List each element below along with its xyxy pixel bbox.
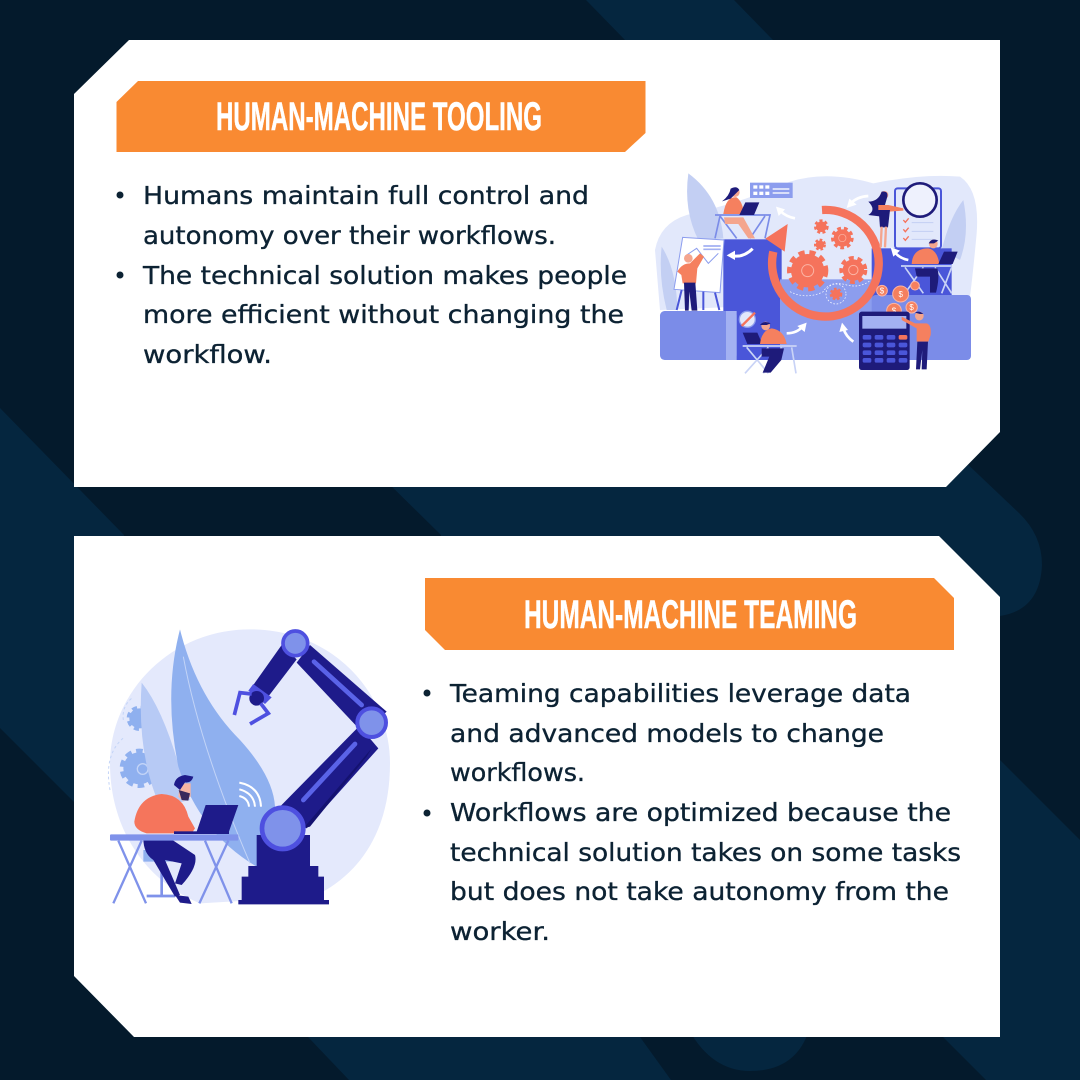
illustration: team around gears cycle: $ xyxy=(898,290,903,299)
illustration: team around gears cycle: $ xyxy=(892,307,897,316)
heading: human-machine teaming: HUMAN-MACHINE TEAMING xyxy=(524,593,857,637)
text block: teaming bullets: Workflows are optimized because the xyxy=(450,798,951,827)
illustration: team around gears cycle: $ xyxy=(880,286,885,295)
illustration: person with robot arm xyxy=(108,629,390,904)
clipboard and magnifier person xyxy=(895,188,941,248)
gears xyxy=(123,752,155,784)
text block: teaming bullets: worker. xyxy=(450,917,550,946)
gears xyxy=(791,254,824,287)
heading: human-machine teaming xyxy=(425,578,954,650)
text block: tooling bullets: more efficient without changing the xyxy=(143,300,624,329)
heading: human-machine tooling: HUMAN-MACHINE TOOLING xyxy=(216,95,542,139)
text block: tooling bullets: The technical solution makes people xyxy=(142,261,627,290)
text block: tooling bullets xyxy=(116,181,627,369)
text block: tooling bullets: workflow. xyxy=(143,340,272,369)
top person at desk xyxy=(715,215,770,238)
illustration: team around gears cycle: $ xyxy=(909,303,914,312)
bottom person at desk xyxy=(743,346,797,373)
text block: teaming bullets: but does not take autonomy from the xyxy=(450,877,949,906)
white arrows xyxy=(727,196,908,342)
text block: teaming bullets: and advanced models to change xyxy=(450,719,884,748)
text block: tooling bullets: Humans maintain full control and xyxy=(143,181,589,210)
person at laptop xyxy=(143,850,175,862)
text block: teaming bullets: technical solution takes on some tasks xyxy=(450,838,961,867)
wifi xyxy=(239,783,261,807)
panel: human-machine teaming xyxy=(74,536,1000,1037)
coins xyxy=(877,281,919,318)
panel: human-machine tooling xyxy=(74,40,1000,487)
robot arm xyxy=(238,835,329,904)
calculator and person xyxy=(859,312,910,370)
text block: tooling bullets: autonomy over their workflows. xyxy=(143,221,556,250)
leaves xyxy=(141,683,190,807)
text block: teaming bullets xyxy=(424,679,961,946)
flipchart person xyxy=(674,237,724,293)
heading: human-machine tooling xyxy=(116,81,646,152)
text block: teaming bullets: workflows. xyxy=(450,758,585,787)
orange cycle ring xyxy=(772,210,879,317)
text block: teaming bullets: Teaming capabilities leverage data xyxy=(449,679,911,708)
right person at desk xyxy=(901,266,952,293)
illustration: team around gears cycle xyxy=(655,173,977,373)
